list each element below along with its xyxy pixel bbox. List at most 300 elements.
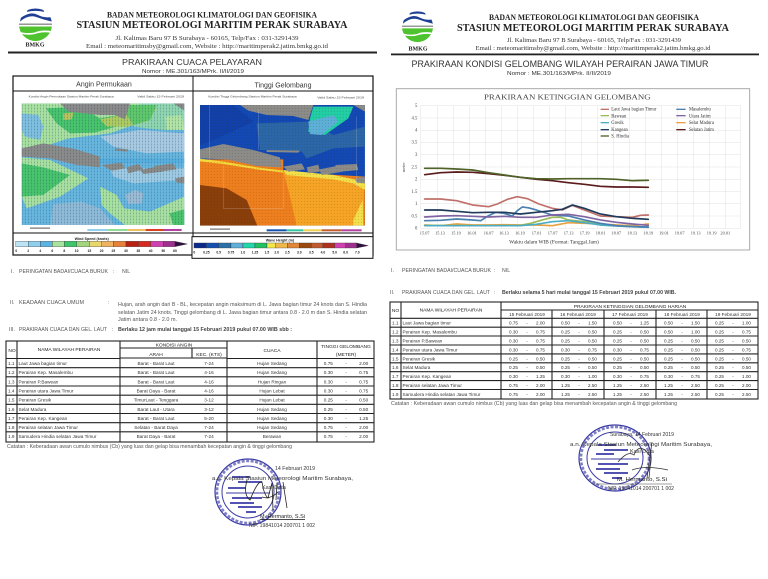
legend: wave height: 7.0 [355, 250, 360, 254]
table row 14: 0.25 - 0.50 [664, 347, 700, 352]
table row 15: TimurLaut - Tenggara [134, 398, 179, 403]
table: five-day wave height forecast: 18 Februari 2019 [664, 312, 700, 317]
table row 15: 0.25 - 0.50 [664, 356, 700, 361]
text block: warnings and general conditions: Hujan, arah angin dari B - BL, kecepatan angin maksimum di L. Jawa bagian timur 24 knots dan S. Hindia [118, 302, 367, 308]
y axis labels: 2.5 [412, 165, 418, 170]
signature block text: Kasi Data [630, 449, 655, 455]
table: weather forecast by sea area: KEC. (KTS) [196, 352, 222, 358]
legend: wave height: 1.0 [241, 250, 245, 254]
table row 18: Hujan Sedang [257, 425, 287, 430]
table row 18 [392, 383, 751, 388]
table row 17 [8, 416, 369, 421]
x axis labels: 16.01 [467, 230, 477, 235]
legend: wind speed: 30 [124, 249, 128, 253]
table row 19: Samudera Hindia selatan Jawa Timur [18, 434, 97, 439]
signature block text: a.n. Kepala Stasiun Meteorologi Maritim Surabaya, [570, 442, 713, 448]
text block: warnings and general conditions: I. [11, 269, 14, 275]
legend: wave height [192, 237, 373, 258]
legend: wave height: 0.25 [203, 250, 210, 254]
table row 15: 0.25 - 0.50 [715, 356, 751, 361]
table row 12: 0.25 - 0.50 [561, 330, 597, 334]
label: surface wind: Angin Permukaan [76, 82, 132, 88]
table row 13: 0.25 - 0.50 [613, 338, 649, 344]
table row 14: Barat Daya - Barat [137, 388, 176, 394]
table row 12: 1.2 [392, 330, 399, 334]
signature block text: NIP. 19841014 200701 1 002 [608, 486, 674, 492]
table row 14: 0.25 - 0.75 [715, 347, 751, 352]
legend: wave height: 3.5 [309, 250, 314, 254]
table row 11: Laut Jawa bagian timur [18, 361, 67, 366]
line chart: wave height forecast [396, 89, 750, 250]
chart legend: Masalembu [689, 108, 711, 113]
x axis labels: 15.07 [420, 230, 430, 235]
letterhead text [76, 10, 348, 50]
y axis labels: 5 [415, 104, 418, 109]
table row 11: 0.25 - 1.00 [715, 320, 751, 326]
legend: wind speed: 35 [136, 249, 140, 253]
signature block text: Surabaya, 14 Februari 2019 [610, 432, 674, 438]
text block: warnings and validity: : [494, 268, 495, 274]
table row 17: 0.25 - 1.00 [715, 374, 751, 379]
table row 18: 1.25 - 2.50 [561, 383, 597, 388]
x axis labels: 17.13 [564, 230, 574, 235]
table row 13: 1.3 [8, 380, 15, 384]
table row 15: Perairan Gresik [402, 356, 436, 361]
table: five-day wave height forecast [390, 302, 758, 399]
text block: warnings and general conditions: Berlaku 12 jam mulai tanggal 15 Februari 2019 pukul 07.00 WIB sbb : [118, 327, 292, 333]
signature [618, 442, 668, 478]
legend: wind speed: 20 [100, 249, 104, 253]
signature block text [570, 432, 713, 492]
table: weather forecast by sea area: CUACA [263, 348, 281, 354]
table: five-day wave height forecast: PRAKIRAAN KETINGGIAN GELOMBANG HARIAN [574, 304, 687, 310]
table row 12: 0.50 - 1.00 [664, 330, 700, 334]
table row 13: 0.30 - 0.75 [324, 380, 369, 384]
icon: BMKG logo [401, 10, 434, 52]
stamp: official seal [579, 425, 651, 491]
table row 16: 3-12 [204, 407, 214, 412]
table row 11: 0.75 - 2.00 [324, 361, 369, 366]
table row 12: Perairan Kep. Masalembu [402, 330, 457, 334]
letterhead text: Jl. Kalimas Baru 97 B Surabaya - 60165, Telp/Fax : 031-3291439 [116, 35, 298, 42]
table row 12: 4-16 [204, 370, 214, 375]
legend: wind speed: 25 [111, 249, 115, 253]
panel: right document, wave forecast [390, 10, 759, 492]
table: five-day wave height forecast: NO [392, 308, 399, 314]
table row 11: 0.50 - 1.50 [561, 320, 597, 326]
x axis labels: 16.19 [515, 230, 525, 235]
table row 15: 0.25 - 0.50 [324, 398, 369, 403]
table row 16: 0.25 - 0.50 [561, 365, 597, 370]
table row 13: Perairan P.Bawean [18, 380, 59, 384]
table row 14: Perairan utara Jawa Timur [18, 388, 74, 394]
table row 14 [392, 347, 751, 352]
text block: warnings and general conditions: II. [10, 300, 14, 306]
table row 18: 1.8 [392, 383, 399, 388]
legend: wind speed: 0 [15, 249, 17, 253]
table row 11: 1.1 [392, 320, 399, 326]
x axis labels: 18.01 [596, 230, 606, 235]
legend: wave height: 0.75 [228, 250, 234, 254]
table row 14: Perairan utara Jawa Timur [402, 347, 458, 352]
table row 18: 0.25 - 2.00 [715, 383, 751, 388]
letterhead text: Email : meteomaritimsby@gmail.com, Website : http://maritimperak2.jatim.bmkg.go.id [86, 43, 329, 50]
map: surface wind [22, 94, 185, 231]
text block: warnings and validity [390, 268, 677, 296]
table row 19: Barat Daya - Barat [137, 434, 176, 439]
heading: wave forecast title: Nomor : ME.301/163/MPrk. II/II/2019 [507, 71, 611, 77]
table row 11: 0.50 - 1.50 [664, 320, 700, 326]
table row 13: 0.30 - 0.75 [509, 338, 545, 344]
text block: warnings and general conditions: PERINGATAN BADAI/CUACA BURUK [19, 269, 109, 275]
legend: wind speed [15, 237, 187, 253]
table row 18: 1.25 - 2.50 [664, 383, 700, 388]
x axis labels: 15.19 [451, 230, 461, 235]
text block: warnings and validity: NIL [502, 268, 510, 274]
table row 19 [8, 434, 369, 439]
table row 17: Perairan Kep. Kangean [402, 374, 452, 379]
table row 11 [392, 320, 751, 326]
signature block text: M. Hermanto, S.Si [260, 514, 305, 520]
legend: wave height: Wave Height (m) [266, 238, 295, 242]
y axis labels: 0.5 [412, 214, 418, 219]
table row 17: 0.30 - 0.75 [664, 374, 700, 379]
table row 11 [8, 361, 369, 366]
x axis labels: 15.13 [435, 230, 445, 235]
heading: wave forecast title: PRAKIRAAN KONDISI GELOMBANG WILAYAH PERAIRAN JAWA TIMUR [412, 59, 709, 70]
table row 11: 0.50 - 1.25 [613, 320, 649, 326]
x axis labels: 19.01 [659, 230, 669, 235]
table row 12: Perairan Kep. Masalembu [18, 370, 73, 375]
table row 17: 0.30 - 1.00 [561, 374, 597, 379]
x axis labels: 16.07 [484, 230, 494, 235]
table row 16: 0.25 - 0.50 [613, 365, 649, 370]
chart legend [601, 108, 714, 139]
legend: wave height: 4.0 [321, 250, 325, 254]
table row 14: 0.30 - 0.75 [561, 347, 597, 352]
table row 12: 0.30 - 0.75 [509, 330, 545, 334]
table row 12: 0.25 - 0.50 [613, 330, 649, 334]
table: five-day wave height forecast: NAMA WILAYAH PERAIRAN [420, 308, 483, 314]
table row 19: 0.25 - 2.50 [715, 392, 751, 397]
table: five-day wave height forecast: 17 Februari 2019 [612, 312, 648, 317]
table row 19: Berawan [263, 434, 282, 439]
table row 19: 1.9 [8, 434, 15, 439]
text block: warnings and general conditions: : [113, 269, 114, 275]
x axis labels: 20.01 [720, 230, 730, 235]
table row 14: 1.4 [8, 388, 15, 394]
chart legend: Selatan Jatim [689, 128, 714, 133]
table row 12: 1.2 [8, 370, 15, 375]
table row 13: 0.25 - 0.50 [561, 338, 597, 344]
letterhead text: STASIUN METEOROLOGI MARITIM PERAK SURABAYA [76, 20, 348, 31]
table row 17: 1.7 [8, 416, 15, 421]
table row 15: 0.25 - 0.50 [613, 356, 649, 361]
signature block text: M. Hermanto, S.Si [617, 477, 667, 483]
table row 15 [392, 356, 751, 361]
y axis labels [412, 104, 418, 232]
icon: BMKG logo [18, 7, 53, 48]
table row 11: Laut Jawa bagian timur [402, 320, 451, 326]
table row 13 [8, 380, 369, 384]
table row 13: 0.25 - 0.50 [715, 338, 751, 344]
text block: warnings and general conditions: KEADAAN CUACA UMUM [19, 300, 84, 306]
table row 13 [392, 338, 751, 344]
table row 15: 0.25 - 0.50 [509, 356, 545, 361]
legend: wave height: 6.0 [343, 250, 348, 254]
x axis labels: 18.19 [643, 230, 653, 235]
text block: warnings and general conditions: selatan Jatim 24 knots. Tinggi gelombang di L. Jawa bagian timur antara 0.8 - 2.0 m dan S. Hindia selatan [118, 310, 367, 316]
chart legend: Utara Jatim [689, 114, 711, 119]
table row 16: 0.25 - 0.50 [715, 365, 751, 370]
table row 12: Hujan Sedang [257, 370, 287, 375]
letterhead text: BADAN METEOROLOGI KLIMATOLOGI DAN GEOFISIKA [489, 13, 699, 22]
table row 11: 7-24 [204, 361, 214, 366]
table row 18: 1.25 - 2.50 [613, 383, 649, 388]
table row 16: 1.6 [392, 365, 399, 370]
table: weather forecast by sea area: (METER) [336, 352, 357, 358]
table row 12: 0.25 - 0.75 [715, 330, 751, 334]
table row 15 [8, 398, 369, 403]
table row 19 [392, 392, 751, 397]
x axis labels: 19.13 [691, 230, 701, 235]
table: weather forecast by sea area [6, 341, 374, 448]
chart legend: Gresik [611, 121, 624, 126]
legend: wind speed: 10 [75, 249, 79, 253]
table: weather forecast by sea area: TINGGI GELOMBANG [321, 344, 371, 350]
table row 15: Perairan Gresik [18, 398, 52, 403]
chart legend: Kangean [611, 128, 629, 133]
table row 15: 1.5 [8, 398, 15, 403]
signature block text: NIP. 19841014 200701 1 002 [249, 523, 315, 529]
table row 19: 0.75 - 2.00 [324, 434, 369, 439]
table row 13: 1.3 [392, 338, 399, 344]
table row 17: 0.30 - 1.25 [324, 416, 369, 421]
legend: wave height: 1.5 [265, 250, 269, 254]
table row 15: 0.25 - 0.50 [561, 356, 597, 361]
table row 18: Perairan selatan Jawa Timur [402, 383, 462, 388]
table row 14: 4-16 [204, 388, 214, 394]
table row 19: 1.25 - 2.50 [613, 392, 649, 397]
map: wave height [200, 94, 365, 231]
table: five-day wave height forecast: 16 Februari 2019 [560, 312, 596, 317]
legend: wind speed: 6 [51, 249, 53, 253]
table row 11: 0.75 - 2.00 [509, 320, 545, 326]
text block: warnings and general conditions: NIL [122, 269, 130, 275]
table: five-day wave height forecast: 15 Februari 2019 [509, 312, 545, 317]
x axis title: Waktu dalam WIB (Format: Tanggal.Jam) [509, 239, 599, 246]
y axis labels: 1.5 [412, 190, 418, 195]
note: cumulonimbus caution: Catatan : Keberadaan awan cumulo nimbus (Cb) yang luas dan gelap bisa menambah kecepatan angin & tinggi gelombang [7, 444, 292, 450]
text block: warnings and validity: Berlaku selama 5 hari mulai tanggal 15 Februari 2019 pukul 07.00 WIB. [502, 290, 677, 296]
table row 18: 1.8 [8, 425, 15, 430]
signature block text: Kasi Data [262, 485, 287, 491]
x axis labels: 18.07 [611, 230, 622, 235]
table row 16: 0.25 - 0.50 [664, 365, 700, 370]
legend: wind speed: 40 [149, 249, 153, 253]
table row 13: 4-16 [204, 380, 214, 384]
heading: forecast title [122, 58, 262, 75]
y axis labels: 1 [415, 202, 418, 207]
signature block text [212, 466, 354, 529]
text block: warnings and general conditions [9, 269, 367, 333]
map: wave height: Valid Sabtu 15 Februari 2019 [317, 96, 365, 100]
legend: wind speed: Wind Speed (knots) [75, 237, 109, 241]
x axis labels: 17.19 [580, 230, 590, 235]
text block: warnings and general conditions: III. [9, 327, 15, 333]
table row 18: 0.75 - 2.00 [324, 425, 369, 430]
table row 19: 1.9 [392, 392, 399, 397]
legend: wind speed: 15 [87, 249, 91, 253]
letterhead text: BADAN METEOROLOGI KLIMATOLOGI DAN GEOFISIKA [107, 10, 317, 20]
legend: wave height: 3.0 [297, 250, 302, 254]
table row 11: Barat - Barat Laut [138, 361, 175, 366]
x axis labels: 18.13 [627, 230, 637, 235]
icon: BMKG logo: BMKG [408, 46, 428, 52]
table row 13: 0.25 - 0.50 [664, 338, 700, 344]
legend: wind speed: 2 [27, 249, 29, 253]
table row 11: 1.1 [8, 361, 15, 366]
map: surface wind: Kondisi Angin Permukaan Stasiun Maritim Perak Surabaya [29, 94, 114, 98]
heading: wave forecast title [412, 59, 709, 77]
table row 19: Samudera Hindia selatan Jawa Timur [402, 392, 481, 397]
table row 12 [392, 330, 751, 334]
legend: wave height: 5.0 [332, 250, 337, 254]
table row 13: Hujan Ringan [258, 380, 287, 384]
legend: wind speed: 4 [39, 249, 41, 253]
series lines [425, 168, 648, 227]
letterhead text: Email : meteomaritimsby@gmail.com, Website : http://maritimperak2.jatim.bmkg.go.id [476, 45, 711, 52]
signature [246, 480, 287, 510]
x axis labels [420, 230, 730, 235]
table row 16: Hujan Sedang [257, 407, 287, 412]
table row 15: Hujan Lebat [259, 398, 285, 403]
table row 15: 1.5 [392, 356, 399, 361]
map: surface wind: Valid Sabtu 15 Februari 2019 [137, 94, 185, 98]
table row 18: 7-24 [204, 425, 214, 430]
table row 17: 1.7 [392, 374, 399, 379]
table row 17: 0.30 - 1.25 [509, 374, 545, 379]
letterhead text [457, 13, 729, 52]
legend: wind speed: 50 [161, 249, 165, 253]
letterhead text: Jl. Kalimas Baru 97 B Surabaya - 60165, Telp/Fax : 031-3291439 [507, 37, 681, 44]
x axis labels: 17.01 [532, 230, 542, 235]
x axis labels: 16.13 [499, 230, 509, 235]
table row 16 [392, 365, 751, 370]
table row 14: Hujan Lebat [259, 388, 285, 394]
table row 19: 0.75 - 2.00 [509, 392, 545, 397]
icon: BMKG logo: BMKG [26, 42, 45, 48]
legend: wind speed: 8 [63, 249, 65, 253]
signature block text: 14 Februari 2019 [275, 466, 315, 472]
table row 17 [392, 374, 751, 379]
table row 17: Perairan Kep. Kangean [18, 416, 68, 421]
table: weather forecast by sea area: KONDISI ANGIN [156, 342, 193, 348]
text block: warnings and validity: : [494, 290, 495, 296]
chart legend: S. Hindia [611, 134, 629, 139]
table: five-day wave height forecast: 19 Februari 2019 [715, 312, 751, 317]
stamp: official seal [215, 459, 281, 525]
table row 14: 1.4 [392, 347, 399, 352]
heading: forecast title: Nomor : ME.301/163/MPrk. II/II/2019 [142, 69, 244, 75]
table: weather forecast by sea area: NAMA WILAYAH PERAIRAN [38, 347, 101, 353]
table row 19: 7-24 [204, 434, 214, 439]
table row 15: 3-12 [204, 398, 214, 403]
table row 16: 1.6 [8, 407, 15, 412]
legend: wave height: 0.5 [216, 250, 221, 254]
chart legend: Selat Madura [689, 121, 714, 126]
y axis labels: 4 [415, 129, 418, 134]
table row 16: Barat Laut - Utara [137, 407, 175, 412]
table row 14 [8, 388, 369, 394]
table row 17: 5-20 [204, 416, 214, 421]
y axis labels: 4.5 [412, 116, 418, 121]
table row 19: 1.25 - 2.50 [664, 392, 700, 397]
table row 12 [8, 370, 369, 375]
legend: wave height: 2.5 [285, 250, 290, 254]
legend: wave height: 0 [193, 250, 195, 254]
table row 14: 0.30 - 0.75 [324, 388, 369, 394]
table row 18: Perairan selatan Jawa Timur [18, 425, 78, 430]
signature block text: a.n. Kepala Stasiun Meteorologi Maritim Surabaya, [212, 476, 354, 482]
table row 18: 0.75 - 2.00 [509, 383, 545, 388]
label: wave height: Tinggi Gelombang [255, 82, 312, 90]
note: cumulonimbus caution: Catatan : Keberadaan awan cumulo nimbus (Cb) yang luas dan gelap bisa menambah kecepatan angin & tinggi gelombang [391, 401, 677, 407]
table row 17: 0.30 - 0.75 [613, 374, 649, 379]
text block: warnings and validity: I. [391, 268, 394, 274]
table row 14: 0.30 - 0.75 [509, 347, 545, 352]
table row 13: Perairan P.Bawean [402, 338, 443, 344]
table row 17: Hujan Sedang [257, 416, 287, 421]
text block: warnings and general conditions: PRAKIRAAN CUACA DAN GEL. LAUT [19, 327, 108, 333]
y axis labels: 0 [415, 227, 418, 232]
table: weather forecast by sea area: ARAH [149, 352, 163, 358]
panel: maps frame [13, 76, 373, 255]
letterhead text: STASIUN METEOROLOGI MARITIM PERAK SURABAYA [457, 23, 729, 34]
x axis labels: 19.07 [675, 230, 685, 235]
text block: warnings and validity: PERINGATAN BADAI/CUACA BURUK [402, 268, 492, 274]
table row 11: Hujan Sedang [257, 361, 287, 366]
table row 14: 0.30 - 0.75 [613, 347, 649, 352]
y axis labels: 2 [415, 178, 418, 183]
table row 16 [8, 407, 369, 412]
table row 17: Barat - Barat Laut [138, 416, 175, 421]
y axis title: meter [401, 162, 406, 172]
table row 16: 0.25 - 0.50 [324, 407, 369, 412]
text block: warnings and general conditions: : [112, 327, 113, 333]
heading: forecast title: PRAKIRAAN CUACA PELAYARAN [122, 58, 262, 67]
table row 19: 1.25 - 2.50 [561, 392, 597, 397]
chart legend: Bawean [611, 114, 627, 119]
y axis labels: 3 [415, 153, 418, 158]
table row 13: Barat - Barat Laut [138, 380, 175, 384]
text block: warnings and validity: PRAKIRAAN CUACA DAN GEL. LAUT [402, 290, 491, 296]
text block: warnings and validity: II. [390, 290, 394, 296]
x axis labels: 19.19 [707, 230, 717, 235]
table row 12: 0.30 - 0.75 [324, 370, 369, 375]
table row 16: Selat Madura [402, 365, 431, 370]
panel: left document, sailing weather forecast [6, 7, 377, 529]
legend: wind speed: 60 [173, 249, 177, 253]
x axis labels: 17.07 [548, 230, 558, 235]
map: wave height: Kondisi Tinggi Gelombang Stasiun Maritim Perak Surabaya [208, 94, 297, 98]
table: weather forecast by sea area: NO [8, 348, 16, 354]
y axis labels: 3.5 [412, 141, 418, 146]
table row 16: 0.25 - 0.50 [509, 365, 545, 370]
chart legend: Laut Jawa bagian Timur [611, 108, 657, 113]
text block: warnings and general conditions: : [108, 300, 109, 306]
chart title: PRAKIRAAN KETINGGIAN GELOMBANG [484, 92, 651, 101]
